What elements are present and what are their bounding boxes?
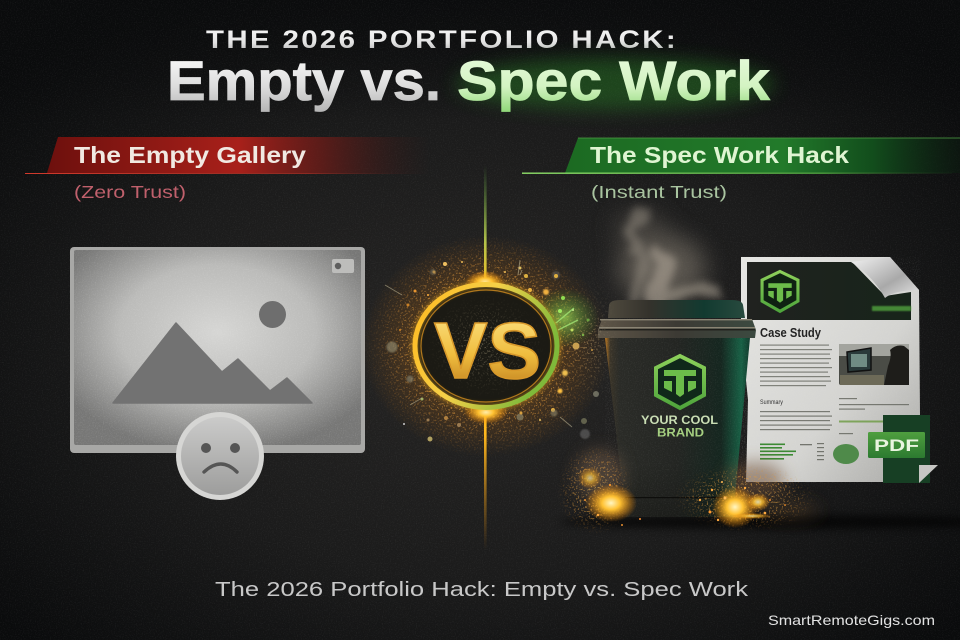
- page: [741, 257, 920, 482]
- mini bar chart: [760, 444, 796, 460]
- cup text: [641, 413, 718, 440]
- top and bottom flares: [464, 271, 508, 424]
- cup text: YOUR COOL: [641, 413, 718, 427]
- green flare: [531, 288, 599, 348]
- panel heading: The Empty Gallery: [25, 137, 430, 202]
- cup base ridge: [625, 497, 734, 498]
- heading text: The Empty Gallery: [74, 142, 306, 168]
- icon: mountains: [113, 323, 312, 403]
- sparks: [385, 260, 580, 442]
- folded file: [883, 415, 930, 483]
- footer caption: The 2026 Portfolio Hack: Empty vs. Spec Work: [215, 579, 749, 601]
- PDF label: [868, 432, 925, 458]
- dust cloud: [576, 449, 820, 518]
- panel heading: The Spec Work Hack: [522, 138, 960, 202]
- icon: sad face: [176, 412, 264, 500]
- page header: [747, 262, 911, 320]
- VS letters: VS: [434, 306, 541, 395]
- cup text: BRAND: [657, 426, 704, 440]
- subheading: (Instant Trust): [591, 182, 727, 202]
- vertical light streak: [484, 165, 487, 550]
- case study document: [741, 257, 921, 483]
- cup body: [605, 338, 750, 517]
- icon: PDF badge: PDF: [874, 436, 919, 455]
- heading text: The Spec Work Hack: [590, 142, 849, 168]
- lid top: [608, 300, 745, 318]
- lid rim: [598, 319, 756, 338]
- icon: PDF badge: [868, 415, 938, 483]
- green blob: [833, 444, 859, 464]
- halo: [361, 236, 611, 456]
- subheading: Summary: Summary: [760, 400, 783, 406]
- cup logo: [656, 356, 704, 408]
- body text lines: [760, 344, 832, 386]
- summary text lines: [760, 398, 909, 434]
- title glow: green: [455, 58, 775, 110]
- icon: toggle: [332, 259, 354, 273]
- mini table: [800, 443, 824, 460]
- site credit: SmartRemoteGigs.com: [768, 612, 935, 628]
- red ribbon: [47, 137, 430, 173]
- title: Empty vs.: Empty vs.: [167, 49, 441, 112]
- ember dust: [557, 270, 817, 535]
- smoke haze: [614, 212, 706, 302]
- coffee cup: [598, 300, 756, 517]
- VS badge: [361, 165, 611, 550]
- document logo: [762, 272, 798, 311]
- fire and sparks at cup base: [557, 270, 820, 535]
- gold dust: [364, 234, 608, 458]
- green ribbon: [565, 138, 960, 173]
- title: Spec Work: Spec Work: [457, 49, 771, 112]
- title kicker: THE 2026 PORTFOLIO HACK:: [206, 26, 678, 54]
- floor: [560, 515, 960, 529]
- smoke wisps: [632, 216, 718, 298]
- icon: sun: [259, 301, 286, 328]
- subheading: (Zero Trust): [74, 182, 186, 202]
- smoke: [614, 212, 718, 302]
- page curl: [851, 257, 919, 298]
- embers: [580, 318, 786, 526]
- ring: [414, 284, 558, 408]
- flames: [578, 467, 772, 528]
- photo: [839, 344, 909, 385]
- heading: Case Study: Case Study: [760, 325, 822, 340]
- title: [167, 26, 775, 112]
- panel: empty gallery placeholder: [70, 247, 365, 500]
- green highlight line: [839, 420, 889, 422]
